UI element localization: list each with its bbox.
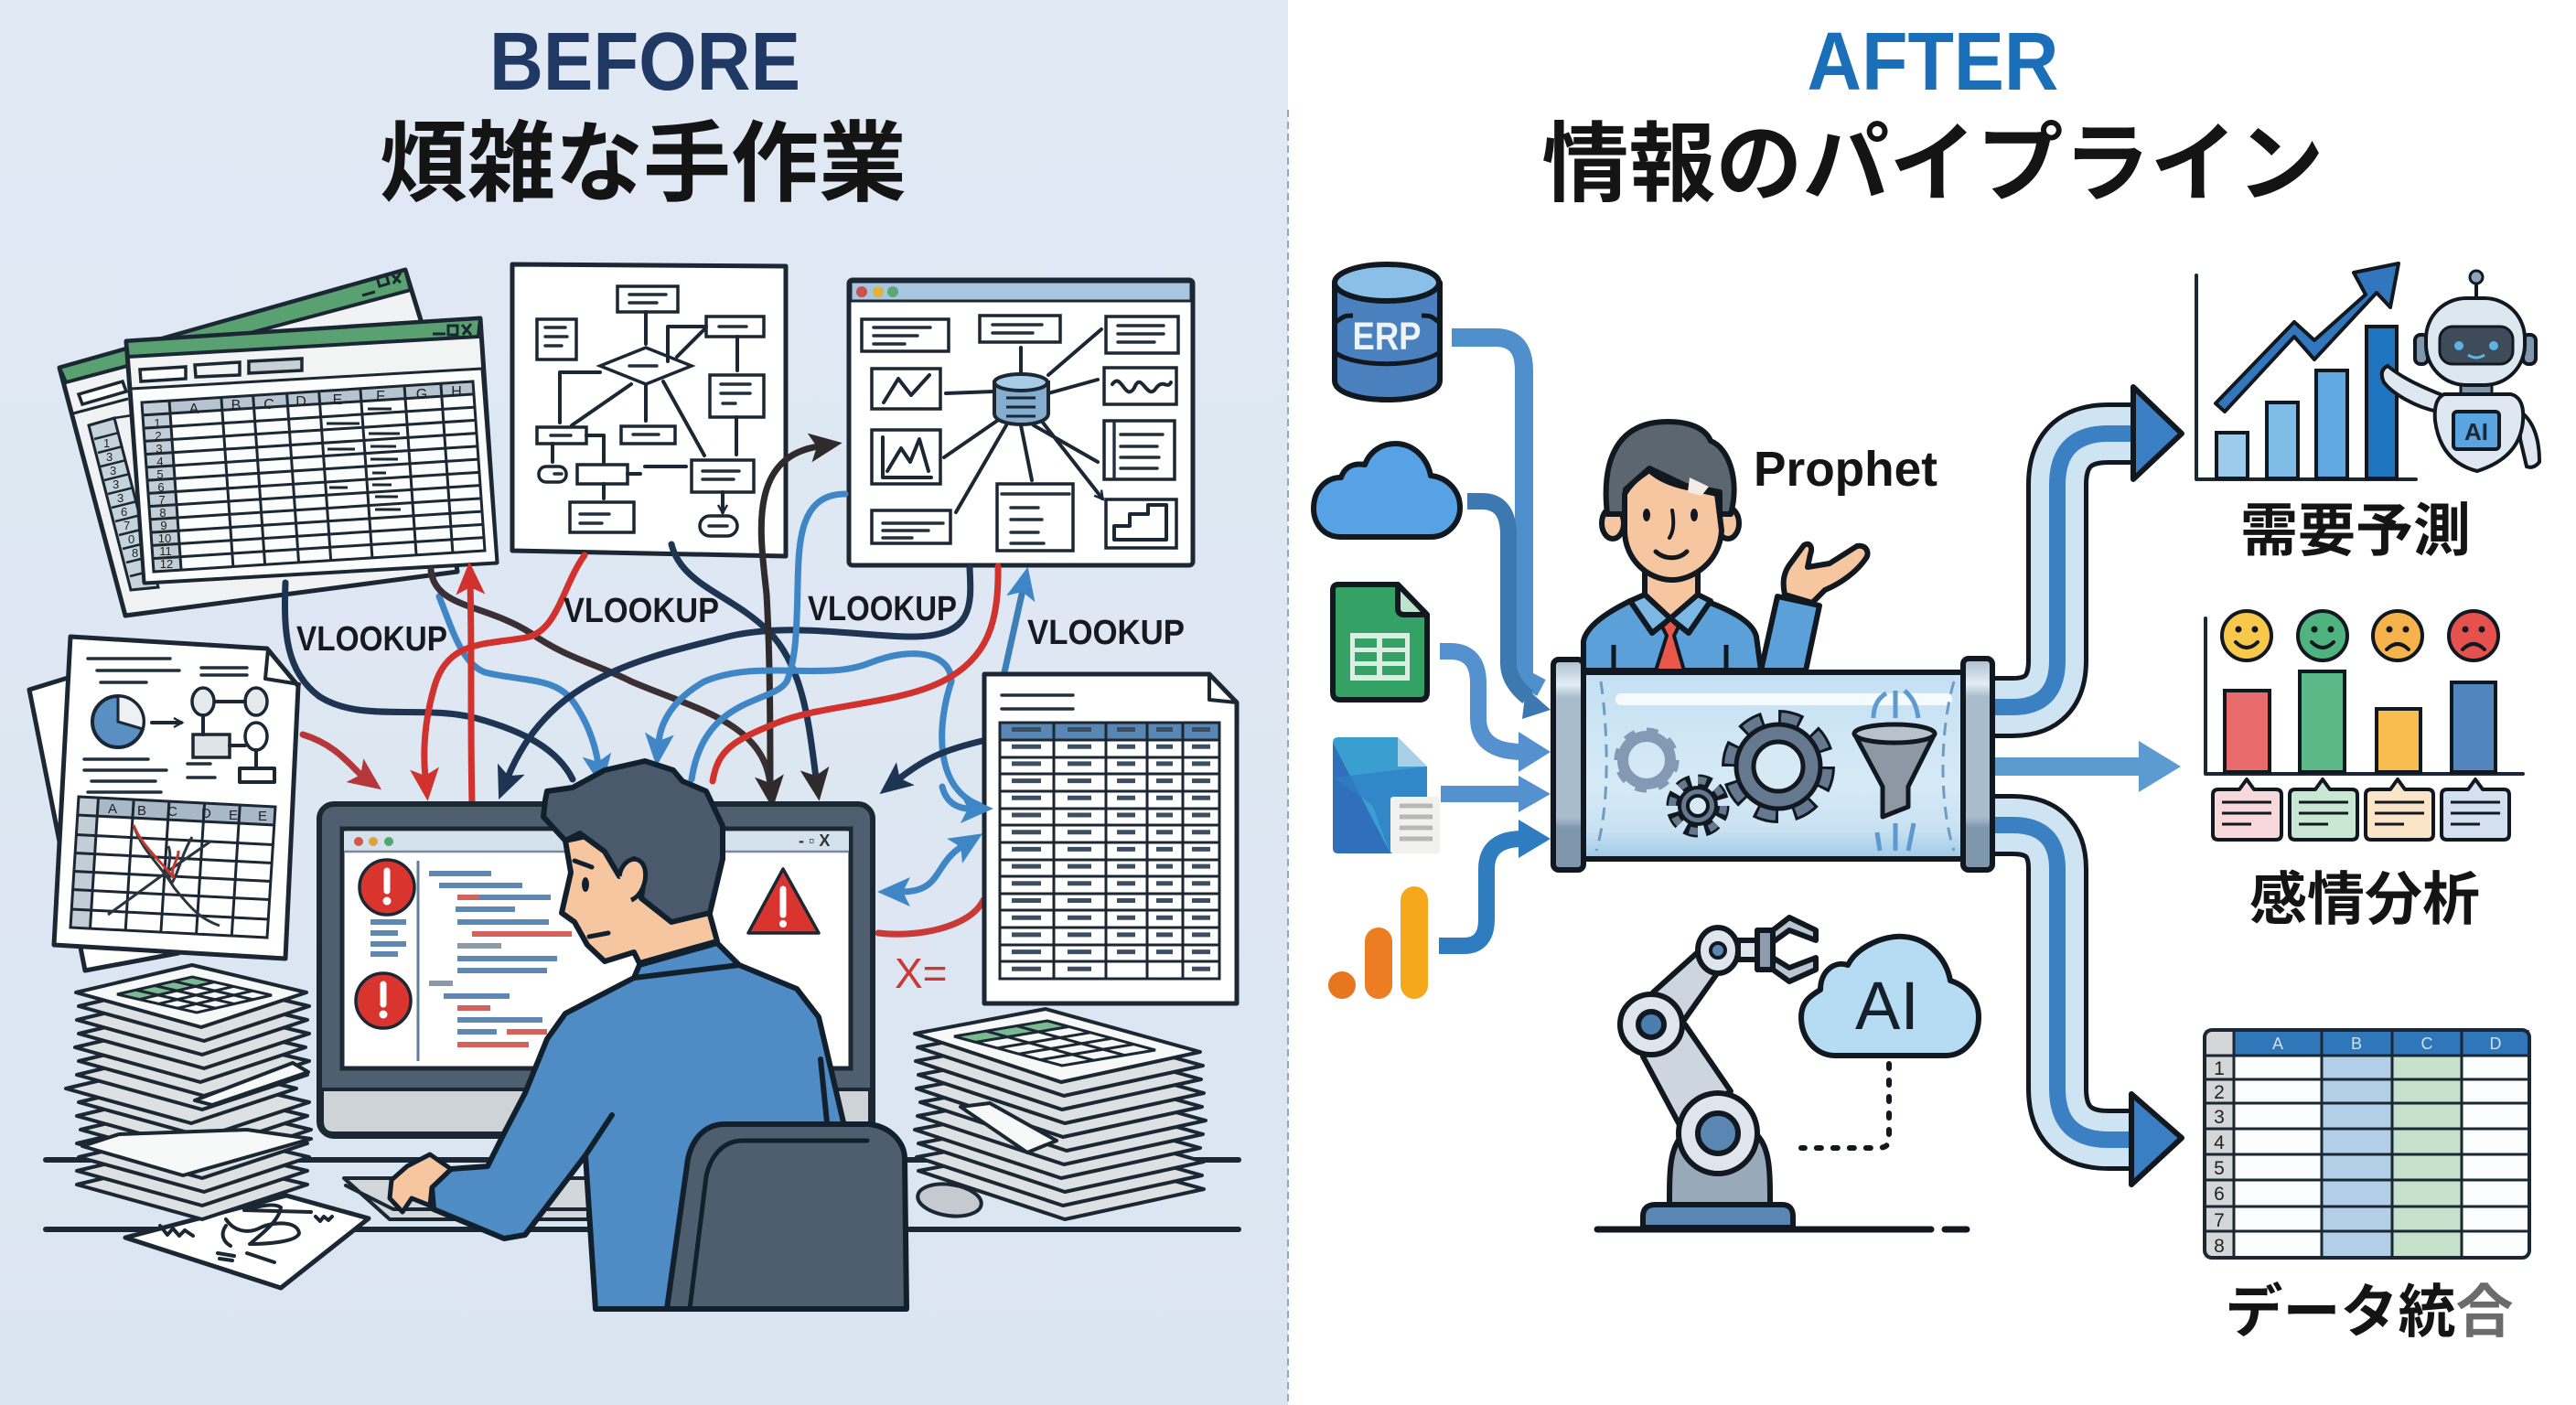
arrow: ERP to pipeline — [1452, 338, 1541, 688]
front spreadsheet window: 4 — [156, 455, 164, 468]
illustration: integrated data table: 6 — [2214, 1184, 2225, 1205]
bars — [2216, 327, 2397, 478]
heading: AFTER: AFTER — [1808, 16, 2058, 108]
front spreadsheet window: 1 — [154, 416, 161, 430]
presenter ears — [1602, 508, 1739, 539]
screen — [342, 829, 851, 1068]
chart axes — [2196, 275, 2416, 479]
front spreadsheet window: C — [263, 397, 274, 413]
front spreadsheet window: E — [333, 392, 342, 408]
loose sheet in stack — [961, 1103, 1057, 1153]
upper arm — [1653, 951, 1718, 1023]
illustration: spreadsheet windows — [59, 270, 497, 616]
note: red scribble: X= — [895, 949, 948, 997]
back spreadsheet window: 3 — [106, 450, 113, 464]
back spreadsheet window: 0 — [128, 532, 134, 546]
dotted connector — [1801, 1064, 1889, 1148]
small spreadsheet with scribble: E — [229, 808, 238, 823]
right cap — [1963, 659, 1992, 870]
trend arrow — [2216, 263, 2399, 412]
sentiment bars — [2225, 671, 2496, 772]
illustration: keyboard — [344, 1178, 588, 1219]
illustration: mouse — [916, 1180, 983, 1220]
hair — [543, 761, 723, 922]
label: VLOOKUP 3: VLOOKUP — [808, 590, 957, 628]
back spreadsheet window: 3 — [110, 464, 116, 477]
AI badge: AI — [2464, 418, 2488, 445]
pie chart — [92, 696, 144, 747]
panel: after background — [1288, 0, 2576, 1405]
antenna — [2474, 284, 2478, 298]
arrow: blue to table — [942, 787, 970, 809]
loose sheet in stack — [195, 1063, 308, 1105]
back spreadsheet window: 3 — [117, 491, 123, 505]
hand — [390, 1154, 451, 1212]
front spreadsheet window: D — [295, 394, 306, 410]
front spreadsheet window: 11 — [159, 544, 172, 558]
heading: BEFORE: BEFORE — [489, 16, 800, 108]
smiley faces — [2222, 611, 2498, 660]
front spreadsheet window: 6 — [157, 480, 165, 494]
robot body — [2435, 394, 2523, 471]
lower arm — [1643, 1024, 1731, 1123]
presenter neck — [1645, 572, 1698, 620]
robot base — [1643, 1205, 1793, 1228]
illustration: demand forecast chart — [2196, 263, 2416, 479]
comment bubbles — [2213, 779, 2509, 840]
back spreadsheet window — [59, 270, 457, 616]
illustration: integrated data table: 5 — [2214, 1158, 2225, 1179]
illustration: integrated data table — [2205, 1030, 2529, 1258]
presenter hair — [1606, 422, 1734, 514]
icon: error circle 2 — [356, 973, 411, 1028]
illustration: right paper stack — [915, 1009, 1206, 1219]
icon: ERP database: ERP — [1352, 315, 1422, 359]
label: 需要予測: 需要予測 — [2240, 499, 2471, 563]
small spreadsheet with scribble: B — [137, 803, 146, 819]
heading: 情報のパイプライン: 情報のパイプライン — [1541, 116, 2324, 213]
small spreadsheet with scribble: E — [258, 809, 267, 824]
pipe: to demand forecast — [1985, 387, 2182, 707]
illustration: integrated data table: A — [2272, 1035, 2283, 1053]
illustration: office chair — [667, 1124, 907, 1309]
gear: small — [1672, 780, 1723, 831]
robot head — [2426, 298, 2525, 385]
chart axes — [2206, 618, 2523, 774]
icon: cloud — [1314, 444, 1460, 537]
small spreadsheet with scribble: D — [201, 806, 211, 821]
top sheet — [76, 965, 306, 1027]
top sheet grid — [117, 977, 272, 1013]
presenter collar — [1630, 595, 1711, 633]
screen: - ▫ X — [799, 831, 830, 850]
small spreadsheet with scribble: A — [108, 801, 117, 817]
illustration: integrated data table: 8 — [2214, 1236, 2225, 1257]
big joint — [1679, 1093, 1757, 1174]
arrow: to sentiment analysis — [1992, 741, 2181, 792]
presenter hand — [1784, 544, 1868, 603]
gripper — [1757, 917, 1816, 981]
arrow: report to pipeline — [1441, 776, 1551, 812]
illustration: presenter Prophet — [1583, 422, 1868, 670]
output pipes — [1985, 387, 2182, 1185]
flow arrows in tube — [1873, 691, 1918, 851]
front spreadsheet window: 9 — [160, 519, 167, 532]
loose sheet low in stack — [82, 1130, 311, 1175]
pipe: to data integration — [1985, 825, 2182, 1185]
robot neck — [2461, 384, 2492, 397]
front spreadsheet window: A — [189, 402, 199, 417]
icon: analytics bars — [1328, 886, 1428, 999]
antenna ball — [2470, 271, 2483, 284]
illustration: sentiment chart — [2206, 611, 2523, 840]
front spreadsheet window — [126, 318, 497, 583]
small spreadsheet with scribble: C — [167, 804, 177, 820]
front spreadsheet window: 7 — [158, 493, 166, 507]
front spreadsheet window: 2 — [155, 429, 162, 443]
front spreadsheet window: 10 — [158, 531, 171, 545]
back spreadsheet window: 8 — [132, 546, 138, 560]
panel: before background — [0, 0, 1288, 1405]
top joint — [1698, 928, 1738, 973]
front spreadsheet window: H — [451, 384, 462, 400]
icon: spreadsheet file — [1333, 585, 1427, 700]
ground line — [1597, 1226, 1967, 1233]
label: Prophet: Prophet — [1754, 442, 1937, 497]
label: データ統合: データ統合 — [2225, 1281, 2514, 1345]
database cylinder — [994, 374, 1048, 424]
icon: ERP database — [1335, 264, 1440, 400]
illustration: monitor — [319, 804, 873, 1136]
pedestal — [1669, 1134, 1770, 1205]
back spreadsheet window: 7 — [123, 519, 130, 532]
gear: pale — [1618, 732, 1675, 788]
illustration: processing tube — [1553, 659, 1992, 870]
middle joint — [1620, 994, 1682, 1055]
pipeline inputs — [1314, 264, 1551, 999]
illustration: AI robot — [2382, 271, 2539, 471]
illustration: integrated data table: 3 — [2214, 1107, 2225, 1128]
top sheet grid — [954, 1021, 1155, 1066]
illustration: flowchart paper — [512, 264, 786, 556]
presenter body — [1583, 601, 1761, 670]
icon: report file — [1333, 737, 1440, 853]
label: VLOOKUP 2: VLOOKUP — [564, 592, 719, 630]
VLOOKUP connecting arrows — [284, 446, 1023, 934]
front spreadsheet window: F — [376, 389, 385, 404]
front spreadsheet window: 3 — [156, 442, 163, 456]
illustration: left paper stack — [66, 965, 311, 1219]
illustration: robot arm — [1597, 917, 1967, 1229]
face — [562, 832, 717, 963]
illustration: integrated data table: 7 — [2214, 1210, 2225, 1231]
illustration: integrated data table: 2 — [2214, 1082, 2225, 1103]
illustration: integrated data table: D — [2490, 1035, 2501, 1053]
arrow: analytics to pipeline — [1439, 820, 1551, 946]
robot ears — [2415, 335, 2536, 364]
illustration: integrated data table: 1 — [2214, 1058, 2225, 1079]
label: 感情分析: 感情分析 — [2249, 868, 2480, 932]
illustration: integrated data table: C — [2420, 1035, 2433, 1053]
arrow: sheets to pipeline — [1440, 651, 1551, 772]
presenter face — [1625, 470, 1722, 580]
illustration: dashboard window — [849, 280, 1193, 565]
illustration: integrated data table: 4 — [2214, 1132, 2225, 1153]
presenter tie — [1656, 619, 1684, 670]
panel divider — [1287, 110, 1289, 1405]
body — [432, 943, 846, 1309]
front spreadsheet window: 5 — [156, 467, 164, 481]
illustration: AI cloud: AI — [1855, 968, 1919, 1044]
robot arm — [2382, 366, 2442, 412]
gear: large — [1730, 718, 1827, 815]
front spreadsheet window: G — [416, 387, 427, 402]
illustration: left paper documents — [29, 637, 299, 971]
small spreadsheet with scribble — [70, 797, 275, 938]
illustration: worried office worker — [390, 761, 846, 1309]
illustration: right paper document with table — [984, 674, 1237, 1003]
heading: 煩雑な手作業: 煩雑な手作業 — [380, 115, 907, 213]
top sheet — [915, 1009, 1200, 1082]
AI badge — [2453, 412, 2499, 449]
icon: error circle 1 — [360, 860, 414, 915]
label: VLOOKUP 4: VLOOKUP — [1027, 614, 1185, 652]
presenter raised arm — [1761, 596, 1819, 670]
icon: warning triangle — [748, 869, 819, 933]
ear — [619, 859, 646, 900]
left cap — [1553, 660, 1583, 870]
front spreadsheet window: 8 — [159, 506, 166, 520]
illustration: AI cloud — [1801, 937, 1979, 1056]
back spreadsheet window: 6 — [121, 505, 127, 519]
shirt fold lines — [585, 965, 827, 1155]
icon: funnel — [1854, 724, 1935, 817]
label: VLOOKUP 1: VLOOKUP — [296, 620, 447, 659]
visor — [2440, 327, 2513, 364]
back spreadsheet window: 1 — [103, 436, 110, 450]
arrow: cloud to pipeline — [1467, 501, 1551, 719]
illustration: integrated data table: B — [2351, 1035, 2362, 1053]
front spreadsheet window: B — [231, 398, 241, 413]
gripper connector — [1738, 940, 1758, 960]
back spreadsheet window: 3 — [113, 477, 119, 491]
illustration: scribbled paper on desk — [125, 1196, 369, 1288]
front spreadsheet window: 12 — [160, 557, 173, 571]
illustration: desk lines — [46, 1160, 1239, 1229]
